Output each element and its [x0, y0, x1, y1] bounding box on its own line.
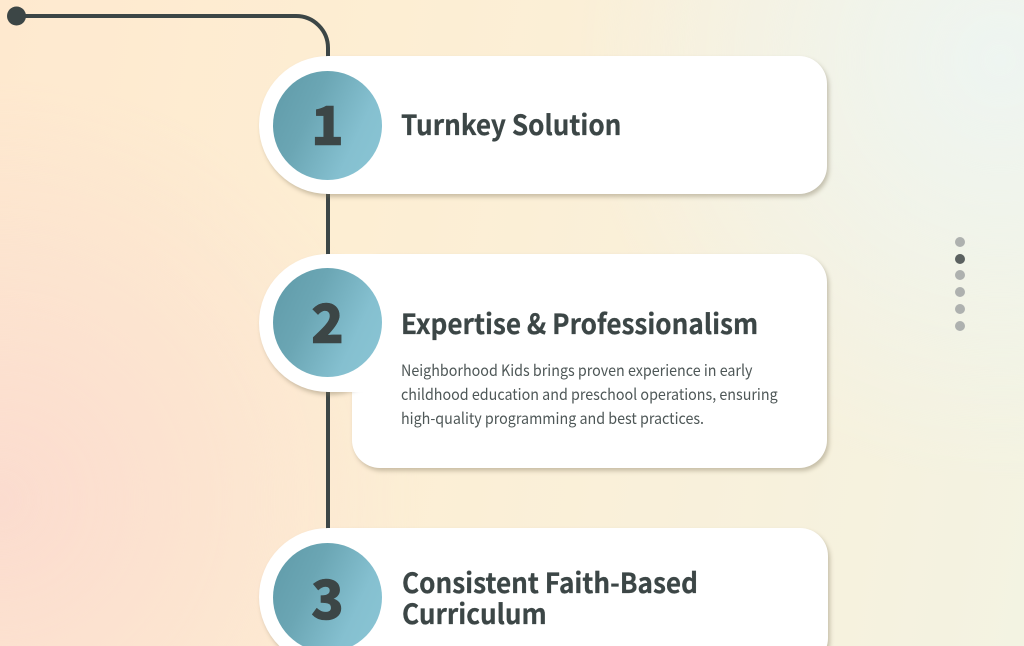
- step 1 card background: [259, 56, 827, 194]
- step 3 heading: Curriculum: [402, 592, 547, 632]
- step 2 description: high-quality programming and best practices.: [401, 407, 704, 429]
- step 2 heading: Expertise & Professionalism: [401, 302, 758, 342]
- step 3 panel: [259, 528, 832, 646]
- step 3 card background: [259, 528, 828, 646]
- step 3 number badge: [273, 543, 382, 646]
- step 3 number: 3: [311, 556, 344, 635]
- step 3 heading: [402, 561, 698, 632]
- pagination dots: [955, 237, 965, 331]
- step 2 panel: [259, 254, 832, 474]
- step 3 heading: Consistent Faith-Based: [402, 561, 698, 601]
- step 2 number badge: [273, 268, 382, 377]
- step 1 heading: Turnkey Solution: [401, 103, 621, 143]
- step 2 number: 2: [311, 280, 344, 359]
- step 1 panel: [259, 56, 832, 200]
- step 2 card cover: [328, 254, 528, 392]
- step 2 description: [401, 359, 778, 429]
- step 2 card body: [352, 254, 827, 468]
- step 1 number badge: [273, 71, 382, 180]
- step 2 description: childhood education and preschool operations, ensuring: [401, 383, 778, 405]
- step 2 description: Neighborhood Kids brings proven experience in early: [401, 359, 752, 381]
- step 2 pill behind badge: [259, 254, 397, 392]
- step 1 number: 1: [311, 82, 344, 161]
